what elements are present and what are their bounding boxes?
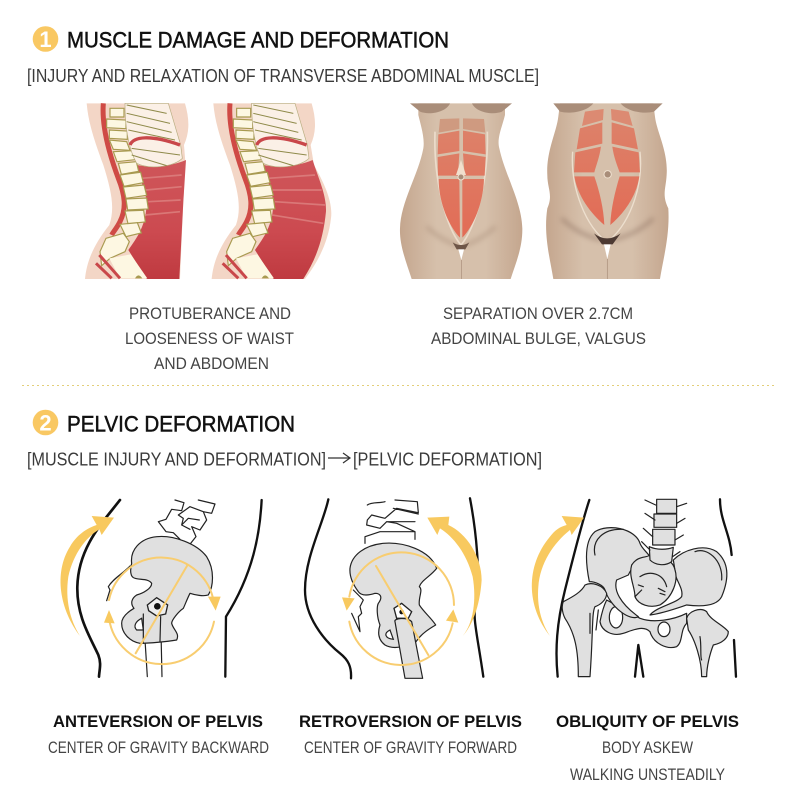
diagram: retroversion of pelvis xyxy=(305,498,483,678)
pelvis bone xyxy=(107,500,215,677)
arrow: backward tilt xyxy=(427,517,482,636)
subtitle: muscle injury leads to pelvic deformation: [PELVIC DEFORMATION] xyxy=(353,448,542,470)
label: anteversion of pelvis: ANTEVERSION OF PELVIS xyxy=(53,713,263,731)
arrow: upward tilt xyxy=(532,516,584,636)
illustration: front torso with separated abdominal muscles xyxy=(546,103,669,279)
label: anteversion of pelvis: CENTER OF GRAVITY BACKWARD xyxy=(48,739,269,757)
rotation circle and axis xyxy=(342,552,458,665)
label: retroversion of pelvis: RETROVERSION OF PELVIS xyxy=(299,713,522,731)
title: muscle damage and deformation: MUSCLE DAMAGE AND DEFORMATION xyxy=(67,28,449,52)
caption: protuberance and looseness: LOOSENESS OF WAIST xyxy=(125,330,294,348)
caption: separation over 2.7cm xyxy=(431,305,646,348)
diagram: anteversion of pelvis xyxy=(61,500,262,677)
subtitle: transverse abdominal muscle: [INJURY AND RELAXATION OF TRANSVERSE ABDOMINAL MUSCLE] xyxy=(27,65,539,86)
body outline xyxy=(556,499,736,677)
section 1 heading xyxy=(33,26,449,52)
section 2 heading xyxy=(33,410,295,436)
label: obliquity of pelvis xyxy=(556,713,739,784)
caption: protuberance and looseness: PROTUBERANCE AND xyxy=(129,305,291,323)
icon: number 1 badge: 1 xyxy=(39,27,52,52)
label: retroversion of pelvis xyxy=(299,713,522,757)
title: pelvic deformation: PELVIC DEFORMATION xyxy=(67,412,295,436)
diagram: obliquity of pelvis xyxy=(532,499,736,677)
body outline xyxy=(305,498,483,678)
pelvis bone xyxy=(562,499,728,677)
caption: protuberance and looseness: AND ABDOMEN xyxy=(154,355,269,373)
label: retroversion of pelvis: CENTER OF GRAVITY FORWARD xyxy=(304,739,517,757)
caption: protuberance and looseness xyxy=(125,305,294,373)
rotation circle and axis xyxy=(104,558,221,664)
caption: separation over 2.7cm: ABDOMINAL BULGE, VALGUS xyxy=(431,330,646,348)
illustration: front torso with normal abdominal muscles xyxy=(400,103,522,279)
subtitle: muscle injury leads to pelvic deformation: [MUSCLE INJURY AND DEFORMATION] xyxy=(27,448,326,470)
label: obliquity of pelvis: WALKING UNSTEADILY xyxy=(570,766,725,784)
icon: number 2 badge xyxy=(33,410,58,436)
label: obliquity of pelvis: OBLIQUITY OF PELVIS xyxy=(556,713,739,731)
illustration: side view spine and abdominal muscle, protruding xyxy=(212,103,331,279)
body outline xyxy=(77,500,262,677)
illustration: side view spine and abdominal muscle, normal xyxy=(85,103,188,279)
arrow: upward tilt xyxy=(61,516,114,636)
caption: separation over 2.7cm: SEPARATION OVER 2.7CM xyxy=(443,305,633,323)
pelvis bone xyxy=(350,500,437,678)
icon: number 2 badge: 2 xyxy=(39,410,52,436)
arrow xyxy=(328,453,350,463)
subtitle: muscle injury leads to pelvic deformation xyxy=(27,448,542,470)
label: obliquity of pelvis: BODY ASKEW xyxy=(602,739,693,757)
label: anteversion of pelvis xyxy=(48,713,269,757)
icon: number 1 badge xyxy=(33,26,58,52)
